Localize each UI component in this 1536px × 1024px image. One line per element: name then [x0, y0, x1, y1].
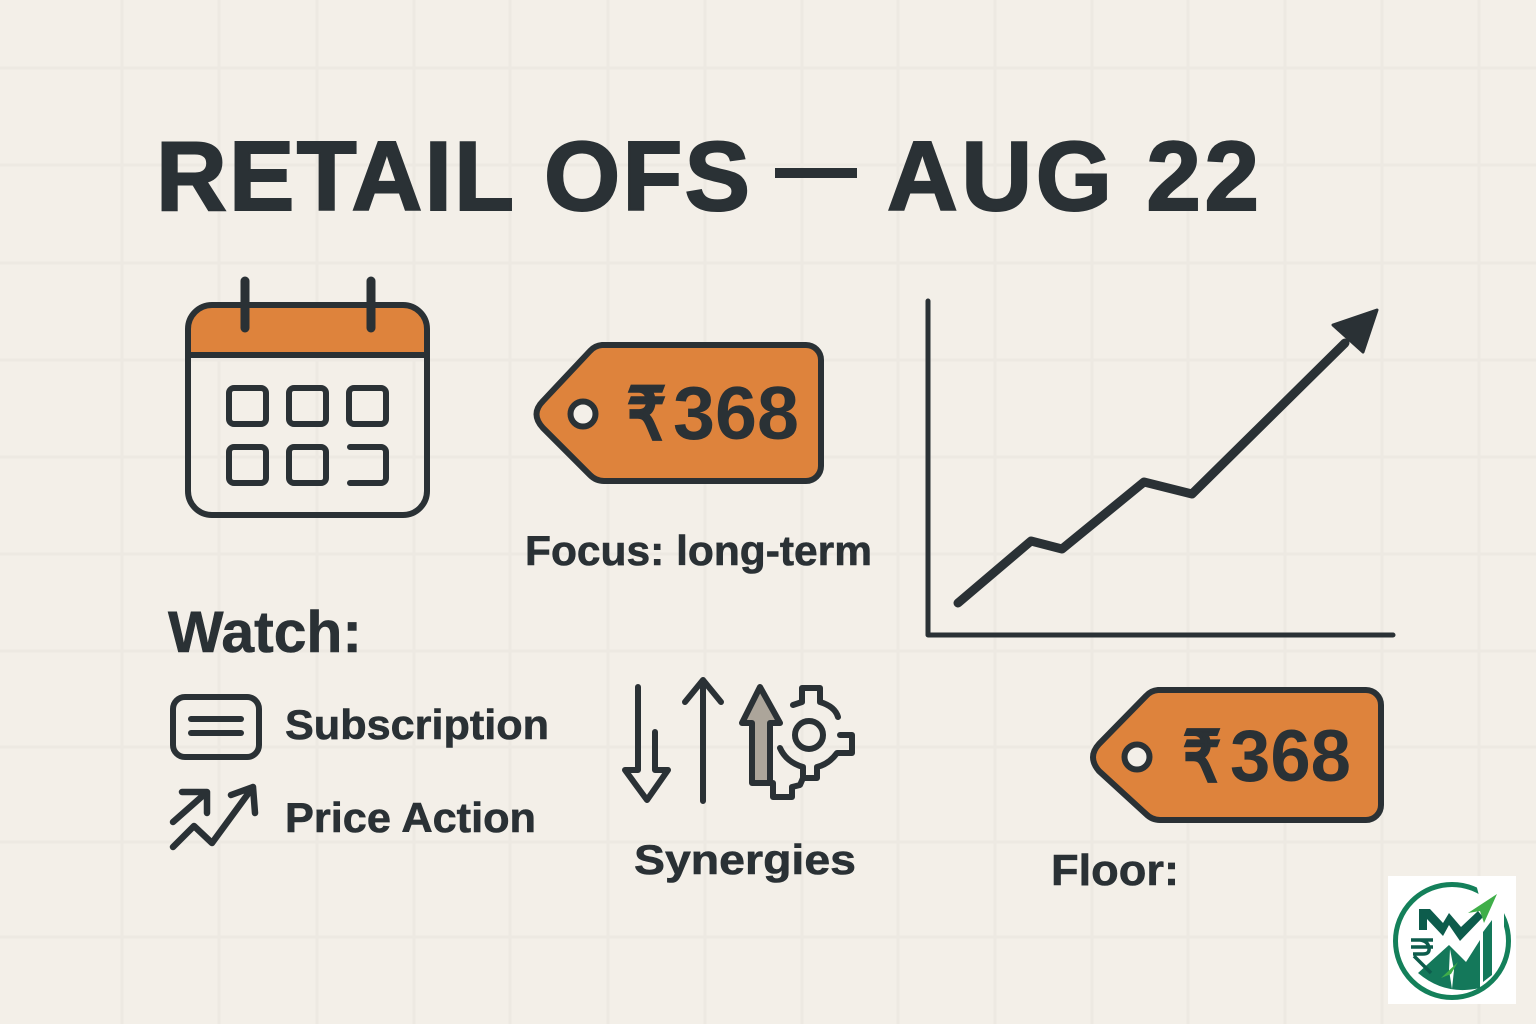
label: price action: Price Action: [285, 794, 536, 841]
title: RETAIL OFS: [156, 121, 750, 231]
label: synergies: Synergies: [634, 836, 856, 883]
chart: rising line: [928, 301, 1393, 635]
price tag: ₹368: 368: [673, 371, 799, 455]
label: subscription: Subscription: [285, 701, 549, 748]
icon: price action arrows: [173, 787, 255, 847]
price tag: floor ₹368: ₹: [1183, 718, 1221, 796]
icon: calendar: [188, 281, 427, 515]
logo: [1388, 876, 1516, 1004]
title: [156, 121, 1259, 231]
title: AUG 22: [887, 121, 1259, 231]
price tag: ₹368: [536, 345, 821, 481]
price tag: floor ₹368: [1093, 690, 1381, 820]
icon: synergies arrows and gear: [625, 680, 852, 801]
label: floor: Floor:: [1051, 846, 1179, 895]
heading: watch: Watch:: [168, 600, 362, 665]
label: focus: Focus: long-term: [525, 527, 872, 574]
price tag: floor ₹368: 368: [1230, 716, 1351, 797]
price tag: ₹368: ₹: [627, 375, 666, 455]
icon: subscription card: [173, 697, 259, 757]
